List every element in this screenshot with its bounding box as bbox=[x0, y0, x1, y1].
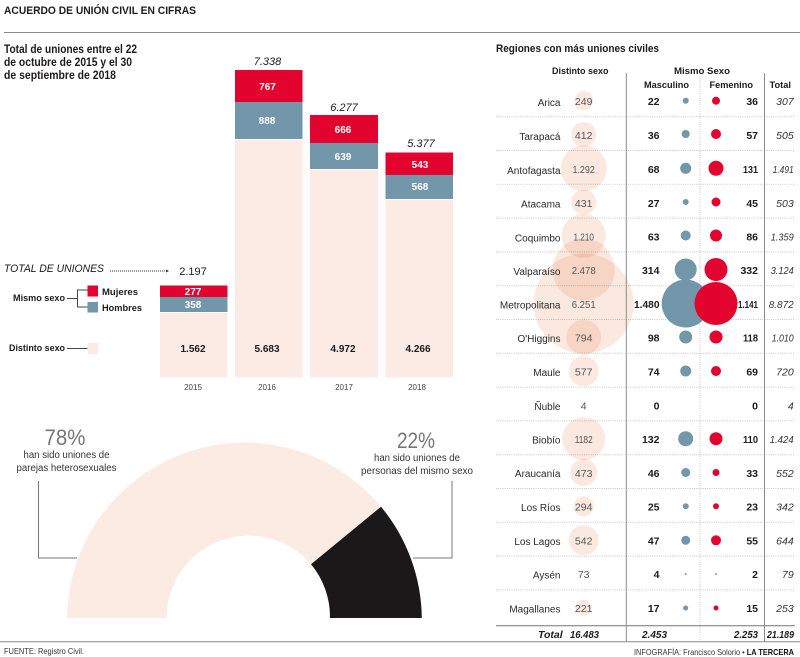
bar 2018: 4.266 bbox=[405, 344, 431, 355]
values: femenino: 110 bbox=[743, 434, 758, 446]
values: total: 342 bbox=[776, 502, 794, 514]
bar 2018 bbox=[386, 138, 453, 392]
values: total: 552 bbox=[776, 468, 794, 480]
values: masculino: 47 bbox=[648, 536, 660, 548]
bar 2015: 2.197 bbox=[179, 266, 207, 278]
values: distinto sexo: 73 bbox=[578, 569, 590, 581]
values: masculino: 1.480 bbox=[634, 299, 660, 311]
values: masculino: 63 bbox=[648, 232, 660, 244]
values: total: 505 bbox=[776, 130, 794, 142]
bar 2015 bbox=[160, 266, 228, 392]
values: femenino: 45 bbox=[746, 198, 758, 210]
column headers: Mismo Sexo bbox=[674, 66, 730, 77]
values: masculino: 36 bbox=[648, 130, 660, 142]
bar 2018: 5.377 bbox=[407, 138, 436, 150]
values: masculino: 27 bbox=[648, 198, 660, 210]
values: total: 503 bbox=[776, 198, 794, 210]
values: femenino: 86 bbox=[746, 232, 758, 244]
source note: FUENTE: Registro Civil. bbox=[4, 646, 84, 656]
values: femenino: 332 bbox=[740, 265, 758, 277]
callout: 22 percent: han sido uniones de bbox=[374, 453, 460, 464]
column headers bbox=[552, 66, 791, 91]
values: femenino: 131 bbox=[743, 164, 758, 176]
values: distinto sexo: 221 bbox=[575, 603, 593, 615]
values: distinto sexo: 249 bbox=[575, 96, 593, 108]
region names: Atacama bbox=[521, 200, 561, 210]
bubbles: masculino bbox=[662, 98, 710, 610]
values: total: 720 bbox=[776, 366, 794, 378]
values: masculino: 74 bbox=[648, 366, 660, 378]
values: masculino: 46 bbox=[648, 468, 660, 480]
region names bbox=[500, 98, 561, 616]
bar 2016: 5.683 bbox=[254, 344, 280, 355]
values: femenino bbox=[738, 96, 758, 615]
totals row: 21.189 bbox=[766, 629, 794, 641]
values: distinto sexo: 294 bbox=[575, 502, 593, 514]
callout: 22 percent: 22% bbox=[397, 428, 435, 453]
bubbles: distinto sexo bbox=[534, 91, 634, 616]
values: masculino: 98 bbox=[648, 332, 660, 344]
column headers: Total bbox=[770, 80, 791, 91]
values: femenino: 118 bbox=[743, 332, 758, 344]
bar 2017: 6.277 bbox=[330, 102, 359, 114]
legend: Hombres bbox=[102, 303, 142, 314]
totals row: 2.253 bbox=[733, 629, 758, 641]
values: distinto sexo: 4 bbox=[581, 400, 587, 412]
legend: Distinto sexo bbox=[9, 343, 65, 354]
values: total: 4 bbox=[788, 400, 794, 412]
values: femenino: 33 bbox=[746, 468, 758, 480]
bar chart heading: Total de uniones entre el 22 bbox=[4, 44, 137, 56]
values: total: 253 bbox=[775, 603, 794, 615]
values: total: 1.359 bbox=[771, 232, 794, 244]
region names: Coquimbo bbox=[515, 234, 561, 244]
values: femenino: 69 bbox=[746, 366, 758, 378]
values: distinto sexo: 431 bbox=[575, 198, 593, 210]
values: distinto sexo: 1182 bbox=[575, 434, 593, 446]
bar 2015: 1.562 bbox=[180, 344, 206, 355]
values: total bbox=[769, 96, 795, 615]
callout: 78 percent: han sido uniones de bbox=[24, 450, 110, 461]
credit: INFOGRAFÍA: Francisco Solorio • LA TERCERA bbox=[634, 647, 794, 657]
callout: 78 percent: parejas heterosexuales bbox=[16, 463, 116, 474]
callout: 78 percent: 78% bbox=[44, 425, 86, 450]
bar chart: yearly unions bbox=[160, 56, 453, 392]
region names: Araucanía bbox=[515, 469, 561, 480]
bar 2018: 568 bbox=[412, 182, 429, 193]
bar 2015: 2015 bbox=[184, 383, 202, 392]
values: femenino: 36 bbox=[746, 96, 758, 108]
values: total: 307 bbox=[776, 96, 795, 108]
segment: 22 percent bbox=[311, 507, 422, 618]
semicircle chart bbox=[67, 443, 422, 618]
values: femenino: 0 bbox=[752, 400, 758, 412]
totals row: Total bbox=[538, 629, 564, 641]
bar 2017: 639 bbox=[335, 152, 352, 163]
region names: Magallanes bbox=[509, 604, 560, 616]
values: distinto sexo: 542 bbox=[575, 536, 593, 548]
bar 2015: 277 bbox=[185, 287, 202, 298]
column headers: Masculino bbox=[644, 80, 689, 91]
bar chart heading: de septiembre de 2018 bbox=[4, 70, 117, 82]
callout: 22 percent: personas del mismo sexo bbox=[361, 466, 473, 477]
values: distinto sexo: 1.292 bbox=[572, 164, 595, 176]
totals row: 2.453 bbox=[641, 629, 667, 641]
bar 2017: 666 bbox=[335, 125, 352, 136]
values: masculino: 68 bbox=[648, 164, 660, 176]
column headers: Femenino bbox=[710, 80, 753, 91]
segment: 78 percent bbox=[67, 443, 381, 618]
values: total: 1.424 bbox=[770, 434, 794, 446]
bar 2016 bbox=[235, 56, 302, 392]
region names: Ñuble bbox=[534, 400, 561, 413]
values: distinto sexo bbox=[572, 96, 596, 615]
values: masculino: 17 bbox=[648, 603, 660, 615]
values: femenino: 55 bbox=[746, 536, 758, 548]
bar 2016: 7.338 bbox=[254, 56, 282, 68]
legend: Mujeres bbox=[102, 287, 138, 298]
values: distinto sexo: 577 bbox=[575, 366, 593, 378]
values: total: 3.124 bbox=[771, 265, 794, 277]
values: masculino: 22 bbox=[648, 96, 660, 108]
region names: Arica bbox=[538, 98, 561, 109]
bar 2017: 4.972 bbox=[330, 344, 356, 355]
values: femenino: 15 bbox=[746, 603, 758, 615]
values: total: 8.872 bbox=[769, 299, 794, 311]
column headers: Distinto sexo bbox=[552, 66, 609, 77]
bubbles: femenino bbox=[694, 97, 738, 610]
bar 2016: 888 bbox=[259, 116, 276, 127]
bar 2016: 767 bbox=[259, 82, 276, 93]
legend: Mismo sexo bbox=[13, 293, 65, 304]
bar 2018: 2018 bbox=[408, 383, 426, 392]
total label with dotted arrow bbox=[4, 263, 169, 275]
region names: Los Ríos bbox=[521, 503, 560, 514]
totals row: 16.483 bbox=[570, 629, 599, 641]
values: distinto sexo: 794 bbox=[575, 332, 593, 344]
regions table heading: Regiones con más uniones civiles bbox=[496, 43, 659, 55]
region names: Valparaíso bbox=[513, 267, 561, 278]
callout: 22 percent bbox=[361, 428, 473, 558]
values: femenino: 23 bbox=[746, 502, 758, 514]
region names: Aysén bbox=[533, 570, 560, 582]
values: total: 79 bbox=[782, 569, 794, 581]
values: distinto sexo: 473 bbox=[575, 468, 593, 480]
values: total: 1.010 bbox=[772, 332, 794, 344]
region names: Antofagasta bbox=[507, 166, 561, 177]
region names: Biobío bbox=[532, 436, 561, 446]
values: distinto sexo: 2.478 bbox=[572, 265, 596, 277]
bar 2017: 2017 bbox=[335, 383, 353, 392]
bar 2017 bbox=[310, 102, 378, 392]
values: distinto sexo: 412 bbox=[575, 130, 593, 142]
values: masculino: 0 bbox=[654, 400, 660, 412]
callout: 78 percent bbox=[16, 425, 116, 558]
values: distinto sexo: 6.251 bbox=[572, 299, 596, 311]
total label with dotted arrow: TOTAL DE UNIONES bbox=[4, 263, 105, 275]
values: masculino: 314 bbox=[642, 265, 660, 277]
legend bbox=[9, 286, 142, 354]
values: total: 644 bbox=[776, 536, 794, 548]
bar chart heading: de octubre de 2015 y el 30 bbox=[4, 57, 132, 69]
bar 2016: 2016 bbox=[258, 383, 276, 392]
region names: Metropolitana bbox=[500, 300, 561, 312]
region names: Maule bbox=[533, 368, 561, 379]
totals row bbox=[538, 629, 794, 641]
values: femenino: 2 bbox=[752, 569, 758, 581]
bar 2018: 543 bbox=[412, 160, 429, 171]
values: femenino: 1.141 bbox=[738, 299, 758, 311]
values: distinto sexo: 1.210 bbox=[573, 232, 594, 244]
values: femenino: 57 bbox=[746, 130, 758, 142]
title: ACUERDO DE UNIÓN CIVIL EN CIFRAS bbox=[4, 4, 196, 17]
values: total: 1.491 bbox=[773, 164, 794, 176]
region names: Tarapacá bbox=[519, 132, 561, 143]
bar 2015: 358 bbox=[185, 300, 202, 311]
regions table bbox=[496, 66, 795, 642]
values: masculino: 4 bbox=[654, 569, 660, 581]
region names: Los Lagos bbox=[514, 537, 560, 548]
values: masculino: 25 bbox=[648, 502, 660, 514]
values: masculino: 132 bbox=[642, 434, 660, 446]
region names: O'Higgins bbox=[517, 334, 560, 345]
values: masculino bbox=[634, 96, 660, 615]
